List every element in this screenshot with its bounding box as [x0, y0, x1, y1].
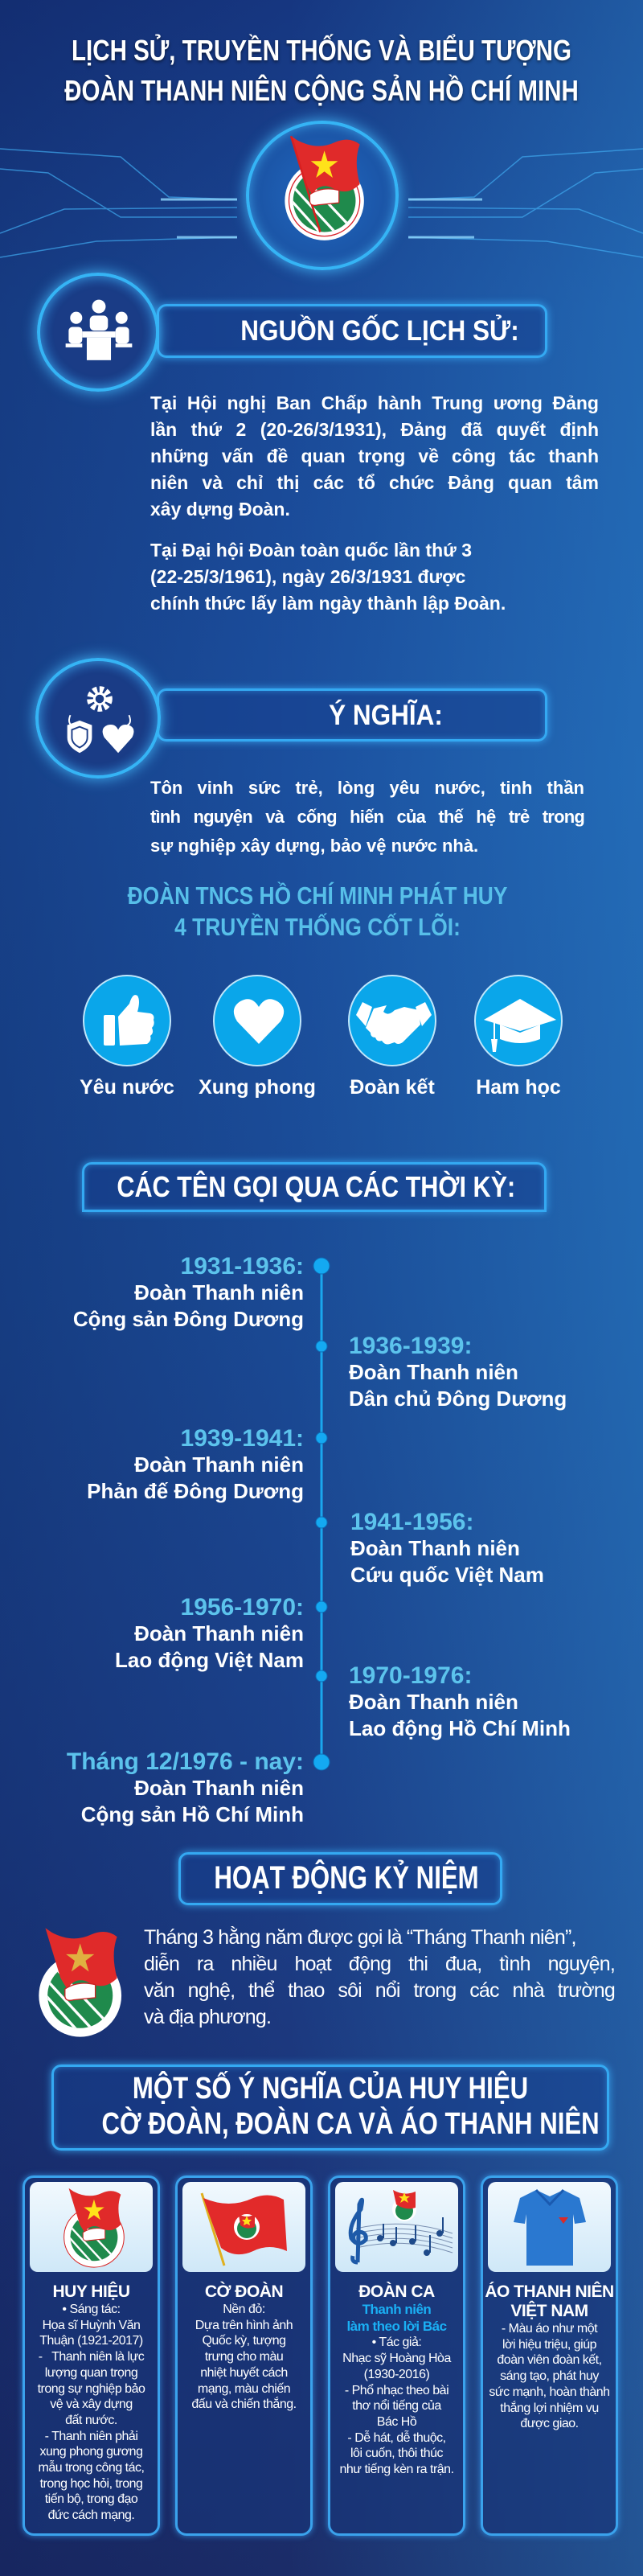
timeline axis [313, 1258, 330, 1771]
card text: trong sự nghiệp bảo [38, 2382, 145, 2396]
card text: Nền đỏ: [223, 2303, 265, 2316]
panel: y nghia [26, 648, 584, 856]
card text: trong học hỏi, trong [40, 2477, 142, 2491]
card text: trưng cho màu [205, 2350, 283, 2364]
card text: tiến bộ, trong đạo [45, 2492, 137, 2506]
card text: nhiệt huyết cách [200, 2366, 288, 2380]
card text: Thuận (1921-2017) [39, 2334, 143, 2348]
card: ao thanh nien [481, 2175, 618, 2536]
icon: graduation cap [474, 975, 563, 1066]
entry 1931-1936: Đoàn Thanh niên [134, 1280, 304, 1304]
text block: sự nghiệp xây dựng, bảo vệ nước nhà. [150, 836, 478, 856]
heading box: hoat dong ky niem: HOẠT ĐỘNG KỶ NIỆM [214, 1860, 479, 1896]
card text: - Thanh niên phải [45, 2430, 137, 2443]
card text: Dựa trên hình ảnh [195, 2319, 293, 2332]
entry 1936-1939: Dân chủ Đông Dương [349, 1387, 567, 1411]
entry 1956-1970: Đoàn Thanh niên [134, 1621, 304, 1645]
title: ĐOÀN THANH NIÊN CỘNG SẢN HỒ CHÍ MINH [64, 74, 579, 107]
icon: meeting [37, 273, 159, 392]
heading box: y nghia huy hieu [46, 2059, 614, 2156]
card text [191, 2281, 297, 2411]
title: LỊCH SỬ, TRUYỀN THỐNG VÀ BIỂU TƯỢNG [72, 34, 571, 67]
card text: đức cách mạng. [48, 2508, 134, 2522]
card text: Quốc kỳ, tượng [202, 2334, 286, 2348]
entry 1939-1941: 1939-1941: [181, 1425, 304, 1452]
card text: Thanh niên [362, 2302, 431, 2317]
label: Xung phong [199, 1076, 316, 1099]
text block: Tại Hội nghị Ban Chấp hành Trung ương Đảng [150, 392, 599, 413]
text block: chính thức lấy làm ngày thành lập Đoàn. [150, 593, 506, 614]
text block: niên và chỉ thị các tổ chức Đảng quan tâm [150, 472, 599, 493]
subheading: 4 truyen thong: 4 TRUYỀN THỐNG CỐT LÕI: [174, 913, 461, 941]
entry 1956-1970: Lao động Việt Nam [115, 1648, 304, 1672]
entry 1976-nay: Cộng sản Hồ Chí Minh [81, 1802, 304, 1826]
card text: Nhạc sỹ Hoàng Hòa [342, 2352, 451, 2365]
card text: • Tác giả: [372, 2336, 421, 2349]
text: thang thanh nien: văn nghệ, thể thao sôi nổi trong các nhà trường [144, 1979, 615, 2002]
icon: heart [213, 975, 301, 1066]
entry 1941-1956: 1941-1956: [350, 1509, 473, 1535]
entry 1941-1956: Đoàn Thanh niên [350, 1536, 520, 1560]
label: Yêu nước [80, 1076, 174, 1099]
card text: mẫu trong công tác, [39, 2461, 144, 2475]
entry 1941-1956: Cứu quốc Việt Nam [350, 1563, 544, 1587]
card text: đấu và chiến thắng. [191, 2397, 297, 2411]
timeline [67, 1253, 571, 1826]
heading box: y nghia huy hieu: MỘT SỐ Ý NGHĨA CỦA HUY HIỆU [133, 2072, 528, 2106]
entry 1970-1976: Đoàn Thanh niên [349, 1690, 518, 1714]
title [63, 34, 579, 109]
text block: (22-25/3/1961), ngày 26/3/1931 được [150, 566, 465, 587]
entry 1976-nay: Tháng 12/1976 - nay: [67, 1748, 304, 1775]
image: music notes [335, 2182, 458, 2272]
entry 1931-1936: 1931-1936: [181, 1253, 304, 1280]
entry 1931-1936 [73, 1253, 304, 1331]
icon: thumbs up [83, 975, 171, 1066]
text: thang thanh nien: diễn ra nhiều hoạt động thi đua, tình nguyện, [144, 1953, 615, 1975]
card text [485, 2281, 614, 2430]
card text: VIỆT NAM [510, 2302, 588, 2320]
subheading: 4 truyen thong: ĐOÀN TNCS HỒ CHÍ MINH PHÁT HUY [128, 881, 507, 910]
card text [37, 2281, 145, 2522]
card text: vệ và xây dựng [50, 2397, 133, 2411]
image: emblem [30, 2182, 153, 2272]
entry 1970-1976: Lao động Hồ Chí Minh [349, 1716, 571, 1740]
text: thang thanh nien [144, 1926, 615, 2028]
icon: emblem small [39, 1929, 122, 2037]
card text: đoàn viên đoàn kết, [497, 2353, 602, 2367]
subheading: 4 truyen thong [127, 881, 507, 941]
card text: ÁO THANH NIÊN [485, 2282, 614, 2301]
icon: handshake [348, 975, 436, 1066]
card text: lượng quan trọng [45, 2366, 137, 2380]
text: thang thanh nien: Tháng 3 hằng năm được gọi là “Tháng Thanh niên”, [144, 1926, 576, 1949]
entry 1939-1941: Đoàn Thanh niên [134, 1452, 304, 1477]
entry 1976-nay: Đoàn Thanh niên [134, 1776, 304, 1800]
card text: thơ nổi tiếng của [352, 2399, 441, 2413]
label: Đoàn kết [350, 1076, 435, 1099]
card text: đất nước. [65, 2414, 117, 2427]
panel: nguon goc lich su [27, 263, 599, 614]
text block: xây dựng Đoàn. [150, 499, 290, 520]
entry 1941-1956 [350, 1509, 544, 1587]
card text: Họa sĩ Huỳnh Văn [43, 2319, 140, 2332]
text block: Tại Đại hội Đoàn toàn quốc lần thứ 3 [150, 540, 472, 561]
label: Ham học [476, 1076, 561, 1099]
card text: lời hiệu triệu, giúp [502, 2338, 596, 2352]
card text: (1930-2016) [364, 2368, 429, 2381]
card text: - Dễ hát, dễ thuộc, [347, 2431, 446, 2445]
heading box: y nghia huy hieu: CỜ ĐOÀN, ĐOÀN CA VÀ ÁO THANH NIÊN [101, 2107, 600, 2141]
text: thang thanh nien: và địa phương. [144, 2006, 271, 2028]
text block: lần thứ 2 (20-26/3/1931), Đảng đã quyết định [150, 419, 599, 440]
text block: những vấn đề quan trọng về công tác thanh [150, 446, 599, 466]
card text: mạng, màu chiến [198, 2382, 290, 2396]
heading: NGUỒN GỐC LỊCH SỬ: [240, 315, 519, 347]
entry 1939-1941 [87, 1425, 304, 1503]
heading box: cac ten goi [77, 1157, 551, 1218]
text block: Tôn vinh sức trẻ, lòng yêu nước, tinh thần [150, 778, 584, 798]
card text: ĐOÀN CA [358, 2282, 435, 2301]
entry 1956-1970: 1956-1970: [181, 1594, 304, 1621]
text block [150, 778, 584, 856]
card text: xung phong gương [40, 2445, 142, 2459]
card text: như tiếng kèn ra trận. [339, 2463, 454, 2476]
card: co doan [175, 2175, 313, 2536]
image: flag [182, 2182, 305, 2272]
decorative circuit lines [0, 148, 643, 258]
image: blue shirt [488, 2182, 611, 2272]
entry 1970-1976: 1970-1976: [349, 1662, 472, 1689]
card text [339, 2282, 454, 2476]
traditions icons row [80, 975, 563, 1099]
card text: CỜ ĐOÀN [205, 2282, 283, 2301]
card text: - Thanh niên là lực [39, 2350, 144, 2364]
icon: gear shield heart [35, 658, 161, 779]
emblem in glowing ring [236, 111, 408, 280]
card text: sáng tạo, phát huy [500, 2369, 599, 2383]
entry 1970-1976 [349, 1662, 571, 1740]
card text: được giao. [520, 2417, 579, 2430]
heading: Ý NGHĨA: [329, 700, 443, 731]
card: huy hieu [23, 2175, 160, 2536]
card text: Bác Hồ [377, 2415, 416, 2429]
entry 1936-1939 [349, 1333, 567, 1411]
entry 1936-1939: Đoàn Thanh niên [349, 1360, 518, 1384]
card: doan ca [328, 2175, 465, 2536]
card text: HUY HIỆU [53, 2282, 129, 2301]
heading box: cac ten goi: CÁC TÊN GỌI QUA CÁC THỜI KỲ: [117, 1170, 515, 1203]
entry 1956-1970 [115, 1594, 304, 1672]
card text: sức mạnh, hoàn thành [489, 2385, 610, 2399]
card text: thắng lợi nhiệm vụ [500, 2401, 599, 2415]
card text: lôi cuốn, thôi thúc [350, 2447, 443, 2460]
text block [150, 392, 599, 614]
card text: • Sáng tác: [62, 2303, 121, 2316]
entry 1931-1936: Cộng sản Đông Dương [73, 1307, 304, 1331]
heading box: hoat dong ky niem [174, 1847, 507, 1911]
entry 1939-1941: Phản đế Đông Dương [87, 1479, 304, 1503]
entry 1976-nay [67, 1748, 304, 1826]
card text: làm theo lời Bác [346, 2319, 447, 2334]
card text: - Phổ nhạc theo bài [345, 2384, 448, 2397]
entry 1936-1939: 1936-1939: [349, 1333, 472, 1359]
card text: - Màu áo như một [502, 2322, 597, 2336]
text block: tình nguyện và cống hiến của thế hệ trẻ trong [150, 807, 584, 827]
header box [157, 304, 547, 358]
header box [157, 688, 547, 742]
